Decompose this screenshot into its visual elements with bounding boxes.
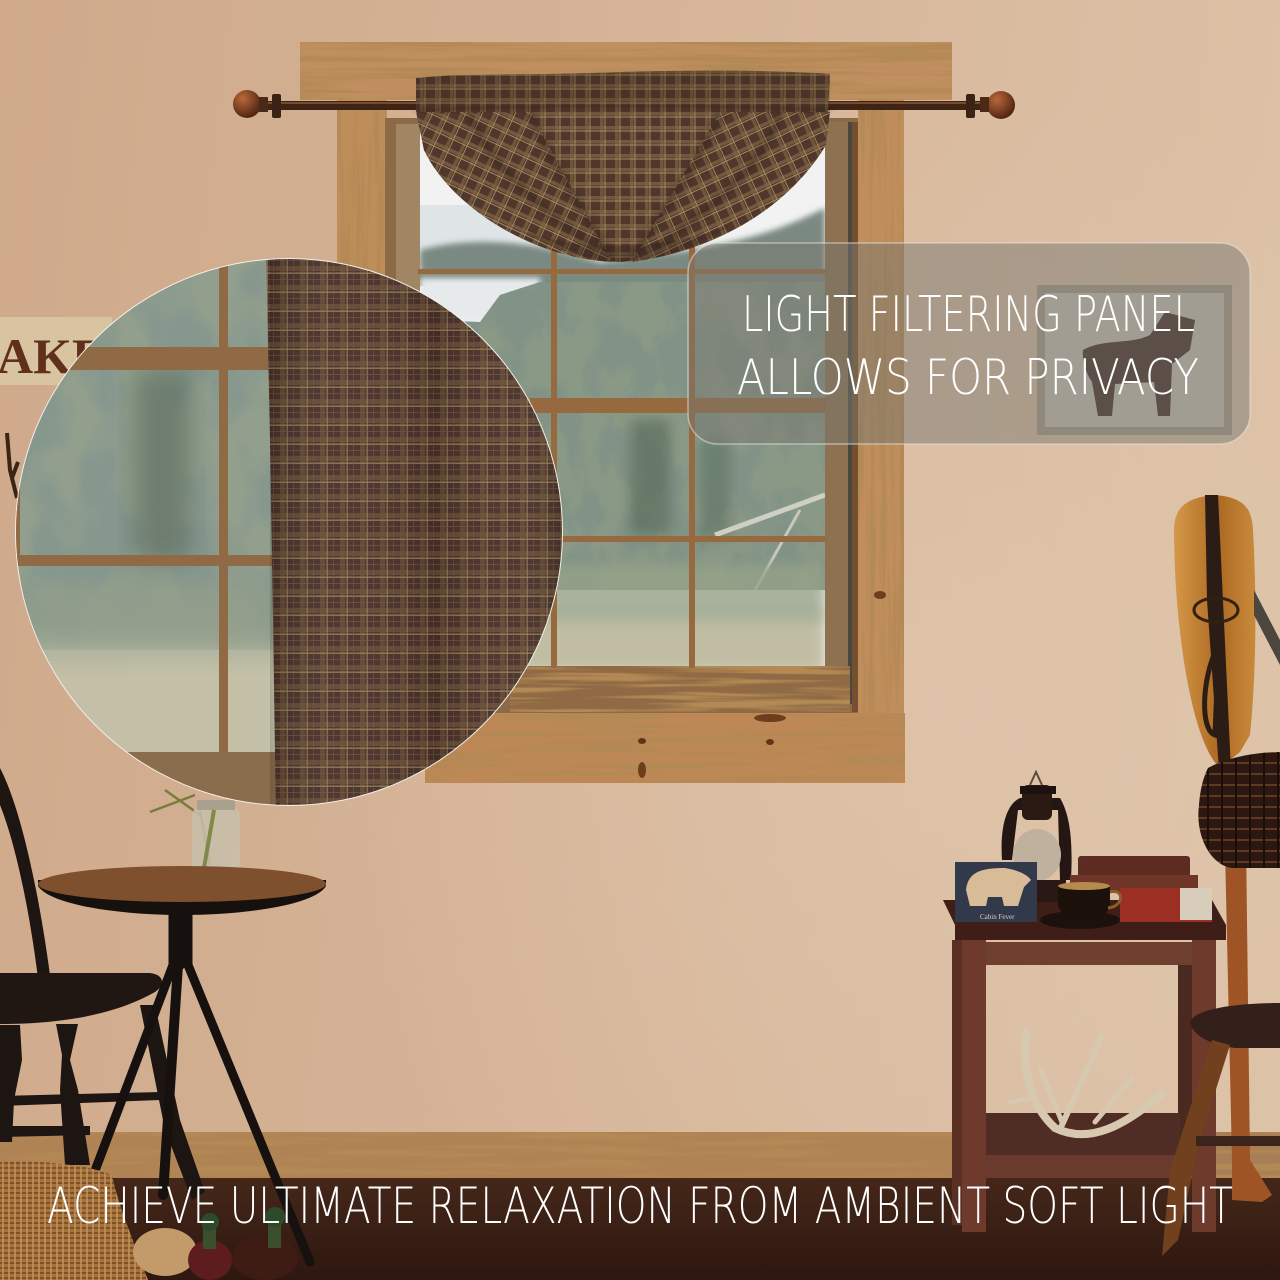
magnified detail circle xyxy=(0,250,570,820)
round table xyxy=(38,866,326,1262)
right board xyxy=(858,100,904,714)
callout text xyxy=(737,286,1199,406)
zoomed window view xyxy=(16,259,288,805)
curtain rod xyxy=(233,90,1015,119)
wall sign: AKE xyxy=(0,328,105,384)
leather strap xyxy=(1205,495,1231,770)
curtain fold shading xyxy=(270,250,570,820)
apron xyxy=(986,942,1192,965)
right finial xyxy=(987,91,1015,119)
window muntins xyxy=(418,240,826,668)
table legs xyxy=(96,915,310,1262)
balloon valance xyxy=(416,71,830,262)
right chair xyxy=(1162,1003,1280,1256)
flower jar xyxy=(150,790,240,877)
wicker basket xyxy=(0,1162,148,1280)
sill board xyxy=(425,713,905,783)
coffee cup xyxy=(1040,882,1121,929)
window sash xyxy=(385,118,858,713)
left chair xyxy=(0,768,205,1200)
zoomed plaid curtain xyxy=(266,250,570,820)
lantern xyxy=(1002,772,1072,902)
zoomed muntins xyxy=(15,250,280,812)
shelf xyxy=(985,1113,1180,1155)
bear card xyxy=(955,862,1037,922)
window casing xyxy=(300,42,952,783)
floor xyxy=(0,1178,1280,1280)
bear card: Cabin Fever xyxy=(980,913,1015,921)
translucent callout panel xyxy=(688,243,1250,444)
baseboard xyxy=(0,1132,1280,1180)
left board xyxy=(337,100,387,340)
front legs xyxy=(962,940,986,1232)
decoy ducks xyxy=(133,1207,298,1280)
left finial xyxy=(233,90,261,118)
top board xyxy=(300,42,952,100)
stacked books xyxy=(1070,856,1212,922)
antler xyxy=(1010,1032,1162,1134)
tabletop xyxy=(943,900,1226,940)
callout text: ALLOWS FOR PRIVACY xyxy=(737,349,1199,406)
paddle xyxy=(1174,495,1280,1202)
fishing creel xyxy=(1198,752,1280,868)
paddle blade xyxy=(1174,495,1255,768)
side table xyxy=(943,900,1226,1232)
window view: forest xyxy=(420,130,825,672)
picture: bison on wall xyxy=(1037,285,1232,435)
paddle shaft xyxy=(1223,760,1272,1202)
wall hook xyxy=(7,433,18,498)
